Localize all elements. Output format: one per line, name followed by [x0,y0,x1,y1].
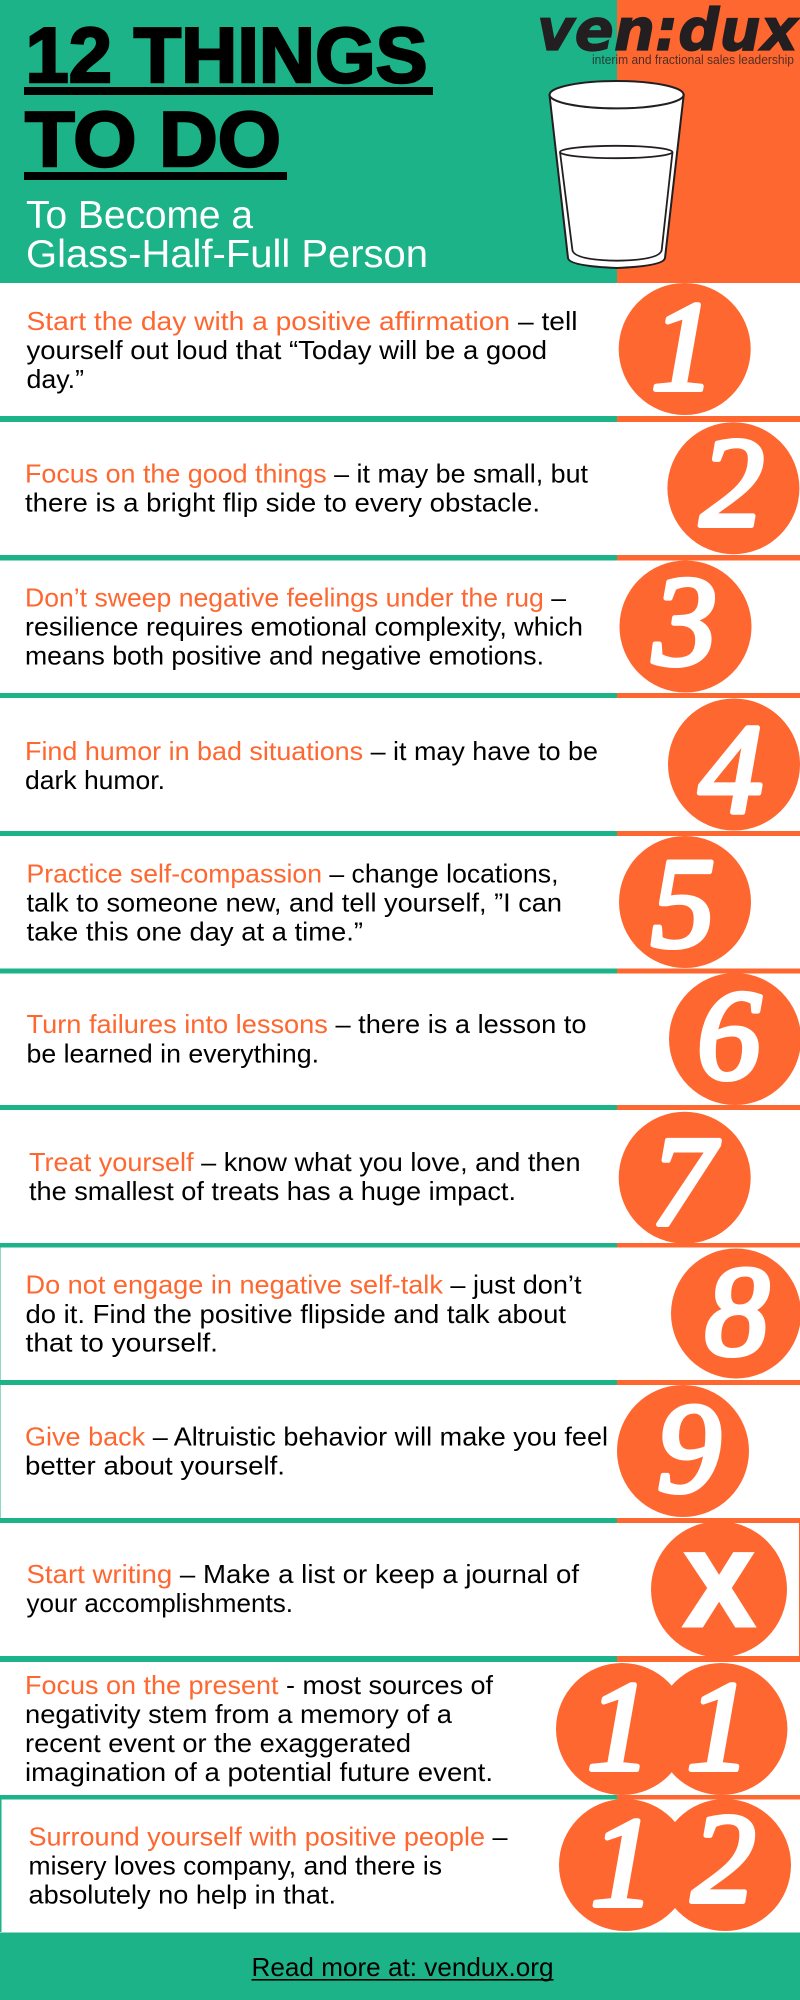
item 3 text: resilience requires emotional complexity, which [25,612,583,642]
item 6 text: Turn failures into lessons – there is a lesson to [26,1009,586,1039]
number badge 4: 4 [699,698,763,840]
item 9 text: better about yourself. [25,1451,285,1481]
item 5 text [26,859,562,947]
item 2 [25,412,799,554]
number badge 1: 1 [651,276,715,418]
item 1 text: Start the day with a positive affirmation – tell [26,306,578,336]
number badge 11: 1 [686,1656,750,1798]
number badge 12: 2 [692,1788,756,1930]
item 11 text [25,1670,494,1787]
number badge 5 [619,832,751,974]
item 3 text [25,583,583,670]
item 2 text [25,459,589,518]
item 1 [26,276,751,418]
item 1 text: yourself out loud that “Today will be a good [26,335,547,365]
item 2 text: Focus on the good things – it may be small, but [25,459,589,489]
item 8 text: that to yourself. [26,1328,218,1358]
number badge 7 [619,1110,751,1252]
footer link: Read more at: vendux.org [252,1952,554,1982]
subtitle [26,194,428,276]
header panel [0,0,800,283]
number badge 2: 2 [700,412,764,554]
item 5 text: take this one day at a time.” [26,917,363,947]
footer [0,1932,800,2000]
item 12 [28,1788,791,1934]
item 11 text: negativity stem from a memory of a [25,1699,453,1729]
item 12 text: absolutely no help in that. [28,1880,336,1910]
number badge 2 [667,412,799,554]
item 4 text [25,736,598,795]
number badge 9 [617,1378,749,1520]
item 7 text: Treat yourself – know what you love, and then [29,1147,581,1177]
item 8 text: do it. Find the positive flipside and talk about [26,1299,567,1329]
item 7 text [29,1147,581,1206]
item 10 text: your accomplishments. [26,1588,293,1618]
title: 12 THINGS [26,11,428,99]
item 4 text: Find humor in bad situations – it may have to be [25,736,598,766]
item 6 [26,964,800,1106]
item 4 [25,698,800,840]
item 1 text [26,306,578,394]
item 3 text: Don’t sweep negative feelings under the rug – [25,583,567,613]
item 12 text [28,1822,508,1910]
item 8 text: Do not engage in negative self-talk – just don’t [26,1270,582,1300]
subtitle: To Become a [26,194,253,237]
item 11 text: Focus on the present - most sources of [25,1670,494,1700]
number badge 6 [669,964,800,1106]
number badge 8: 8 [705,1240,769,1382]
item 3 text: means both positive and negative emotions. [25,640,544,670]
item 4 text: dark humor. [25,765,165,795]
number badge 6: 6 [697,964,761,1106]
item 9 text [25,1422,608,1481]
row divider bars [0,416,800,1932]
number badge 11 [556,1656,787,1798]
item 12 text: misery loves company, and there is [28,1851,442,1881]
item 1 text: day.” [26,364,84,394]
number badge 12: 1 [590,1792,654,1934]
item 2 text: there is a bright flip side to every obstacle. [25,488,540,518]
item 5 text: talk to someone new, and tell yourself, ”I can [26,888,562,918]
number badge 1 [619,276,751,418]
item 9 [25,1378,749,1520]
item 11 text: imagination of a potential future event. [25,1757,493,1787]
subtitle: Glass-Half-Full Person [26,233,428,276]
number badge 9: 9 [657,1378,721,1520]
item 12 text: Surround yourself with positive people – [28,1822,508,1852]
icon: half-full glass of water [550,81,684,268]
number badge 12 [559,1788,791,1934]
item 7 text: the smallest of treats has a huge impact. [29,1176,516,1206]
item 8 [26,1240,800,1382]
title: TO DO [25,95,281,183]
title [24,11,433,183]
number badge 8 [671,1240,800,1382]
item 10 [26,1521,787,1657]
number badge 10 [651,1521,787,1657]
item 10 text [26,1559,580,1618]
item 10 text: Start writing – Make a list or keep a journal of [26,1559,580,1589]
item 5 [26,832,751,974]
logo: vendux: interim and fractional sales leadership [592,53,794,67]
item 11 [25,1656,787,1798]
number badge 10: X [685,1533,753,1647]
item 6 text: be learned in everything. [26,1038,319,1068]
number badge 3: 3 [652,550,717,692]
number badge 4 [668,698,800,840]
number badge 3 [620,550,752,692]
item 7 [29,1110,751,1252]
item 11 text: recent event or the exaggerated [25,1728,411,1758]
item 6 text [26,1009,586,1068]
item 8 text [26,1270,582,1358]
number badge 5: 5 [651,832,715,974]
item 3 [25,550,752,692]
number badge 7: 7 [651,1110,720,1252]
item 5 text: Practice self-compassion – change locations, [26,859,558,889]
item 9 text: Give back – Altruistic behavior will make you feel [25,1422,608,1452]
number badge 11: 1 [587,1656,651,1798]
